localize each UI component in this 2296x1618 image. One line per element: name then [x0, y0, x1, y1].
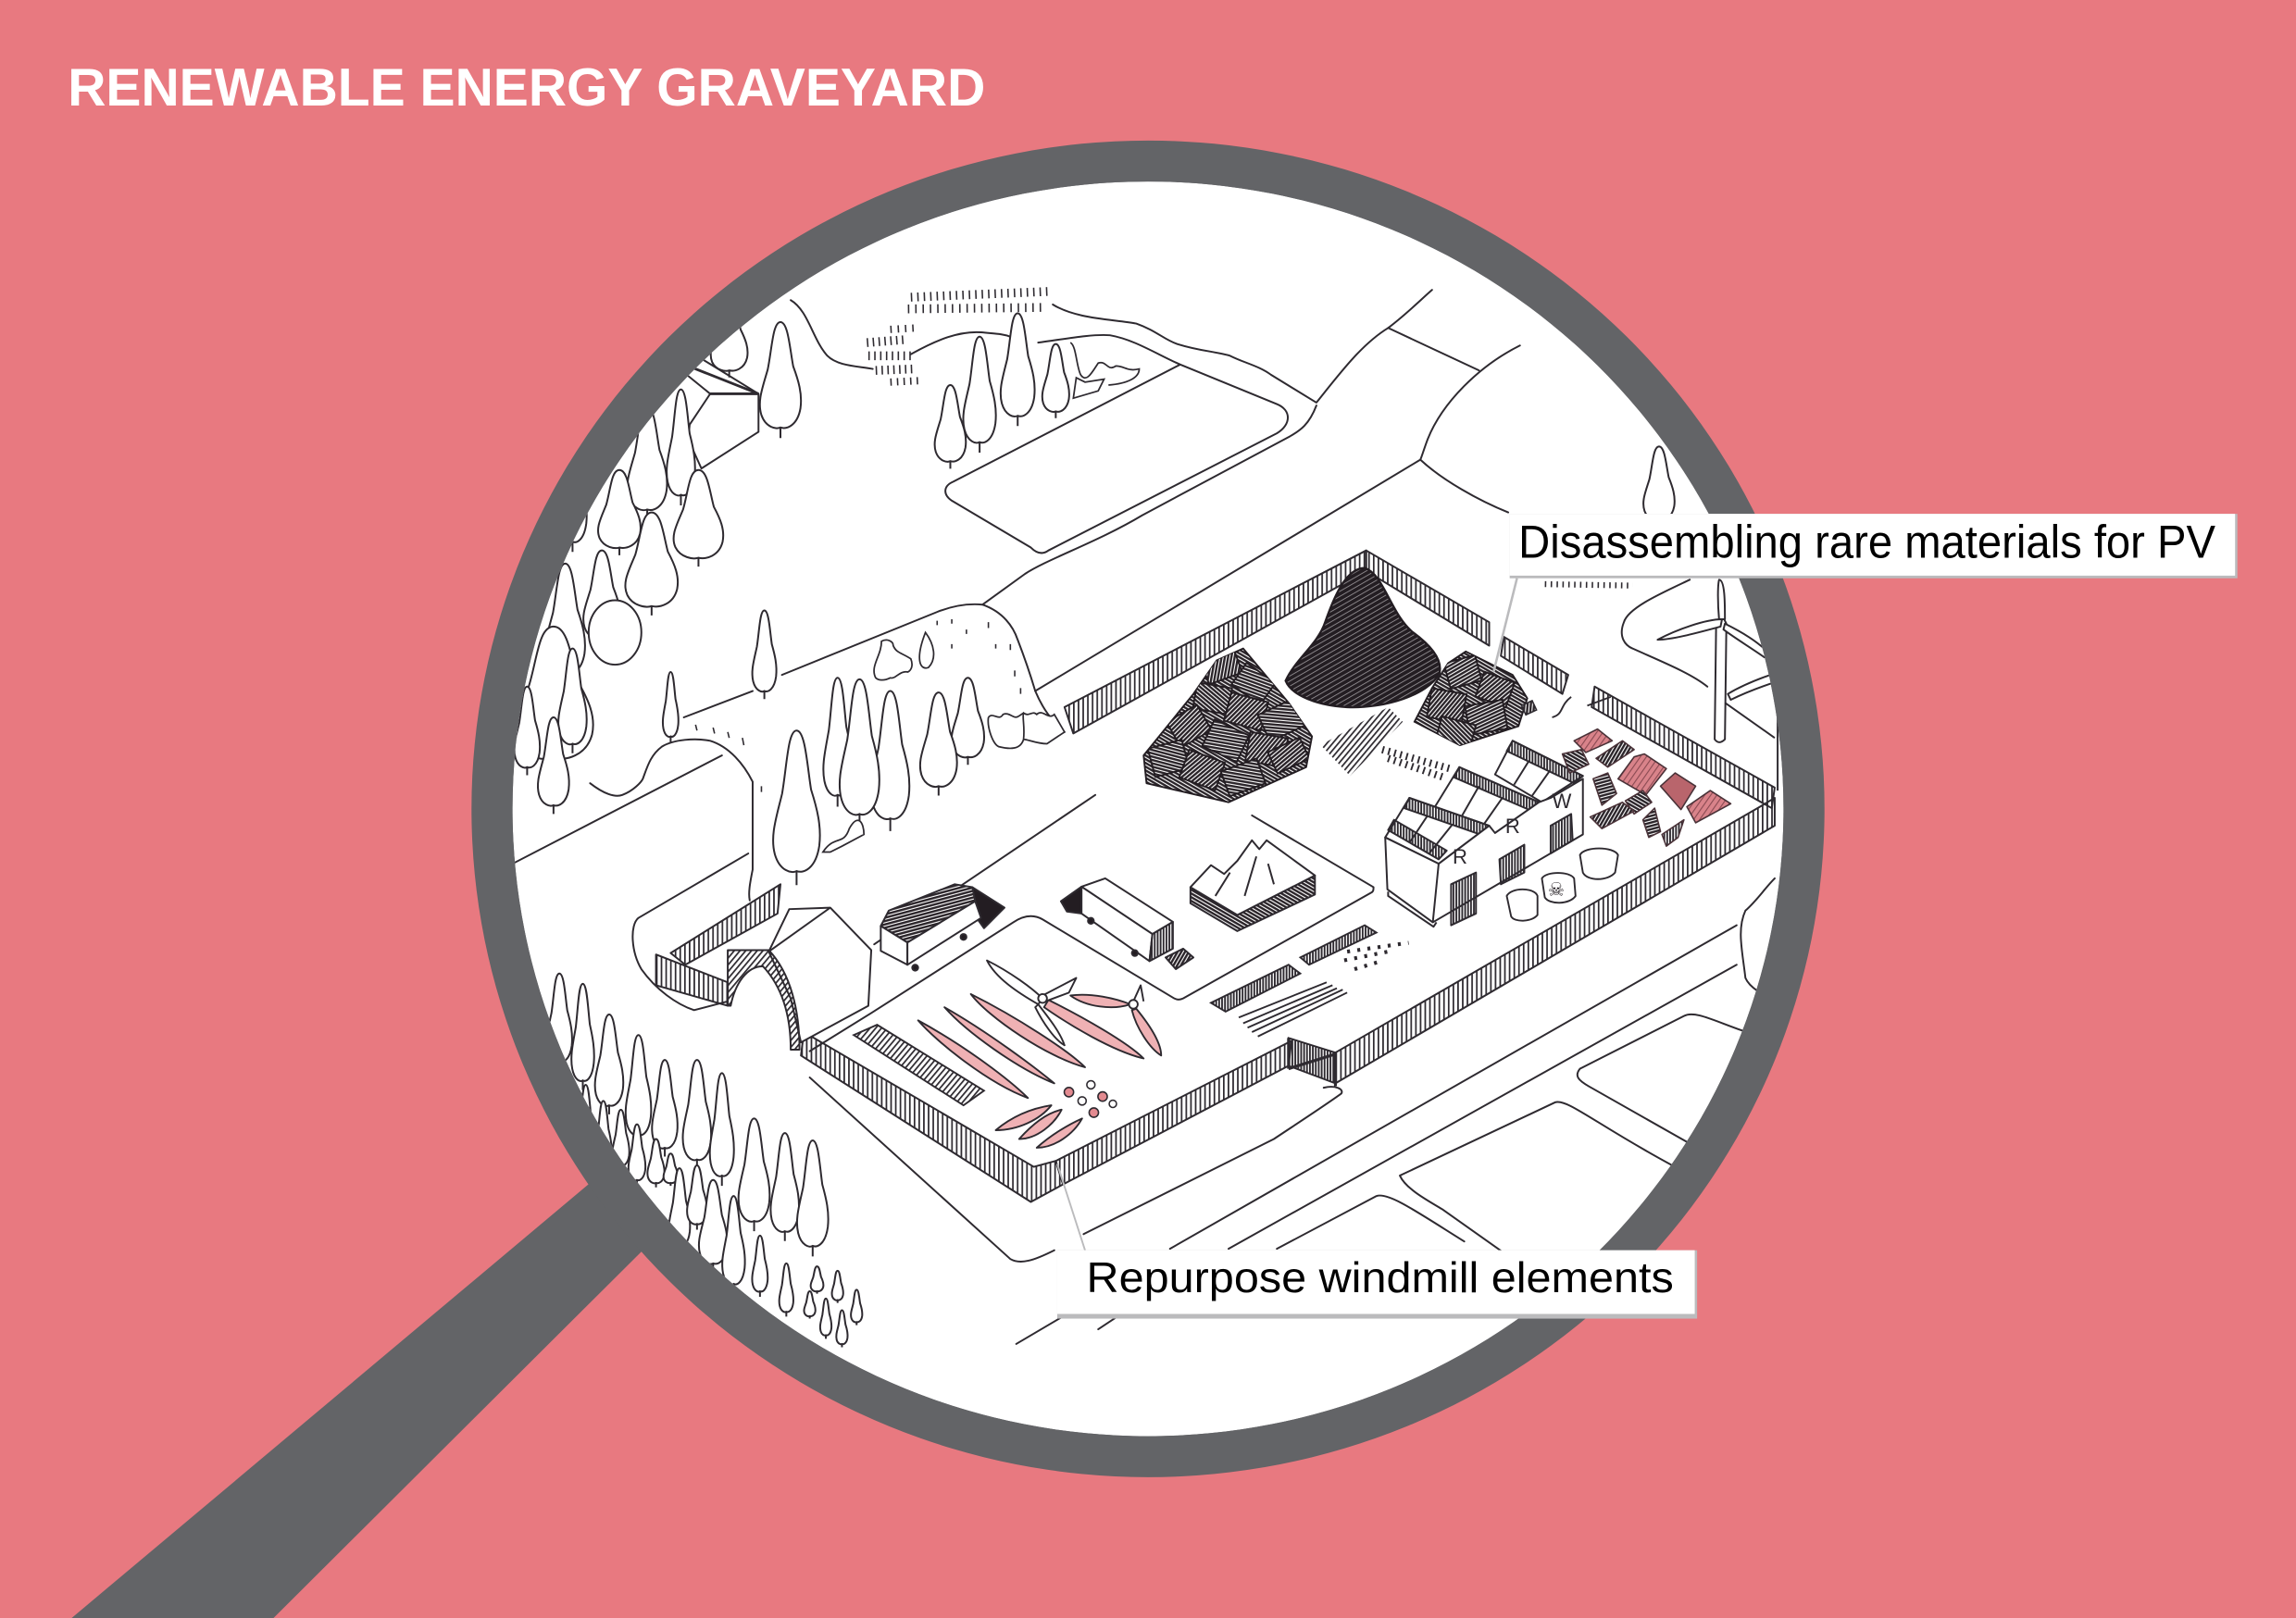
- crate of broken parts: [1191, 840, 1315, 931]
- recycling factory with sawtooth roof: [1385, 741, 1583, 927]
- gatehouse with arch: [728, 908, 871, 1050]
- magnifying glass ring: [471, 141, 1825, 1477]
- title: RENEWABLE ENERGY GRAVEYARD: [68, 58, 985, 118]
- callout: repurpose windmill elements: [1057, 1164, 1697, 1319]
- callout: repurpose windmill elements: Repurpose windmill elements: [1087, 1253, 1674, 1301]
- house at top left: [687, 358, 758, 468]
- background tree and wind turbine: [1643, 446, 1778, 790]
- callout: disassembling rare materials: [1493, 514, 2238, 672]
- hatched stock bar beside blades: [854, 1025, 984, 1105]
- sorted hatch swaths: [1321, 697, 1611, 778]
- lens with isometric sketch of the graveyard site: [513, 181, 1783, 1437]
- truck with box trailer: [1061, 878, 1193, 969]
- hatched bars and sorted rods: [1211, 926, 1409, 1037]
- tree group: behind field: [935, 313, 1140, 468]
- roads and landscape lines: [513, 290, 1775, 1344]
- tree group: forest lower left: [546, 974, 862, 1348]
- perimeter fence: [656, 551, 1775, 1202]
- tree group: upper left: [514, 300, 801, 814]
- wind turbine blades: [918, 961, 1161, 1148]
- barrels with hazard mark: ☠: [1548, 879, 1565, 901]
- factory letters: R: [1453, 845, 1467, 868]
- callout: disassembling rare materials: Disassembling rare materials for PV: [1518, 517, 2216, 568]
- factory letters: W: [1553, 790, 1572, 813]
- grass tufts on the hill: [695, 292, 1633, 792]
- stack: broken panels pile: [1143, 648, 1312, 803]
- truck loaded with panels: [880, 884, 1004, 971]
- sorted panels, rare materials in red: [1563, 729, 1730, 846]
- stack: small heap: [1415, 652, 1528, 751]
- magnifying glass handle: [70, 1183, 644, 1618]
- barrels with hazard mark: [1506, 849, 1618, 921]
- gate: [1289, 1038, 1335, 1087]
- factory letters: [1454, 794, 1572, 864]
- stack: cone heap: [1286, 568, 1440, 707]
- rotor hubs and bearings: [1065, 1081, 1117, 1117]
- factory letters: R: [1505, 815, 1520, 838]
- tree group: middle slope: [663, 611, 1065, 885]
